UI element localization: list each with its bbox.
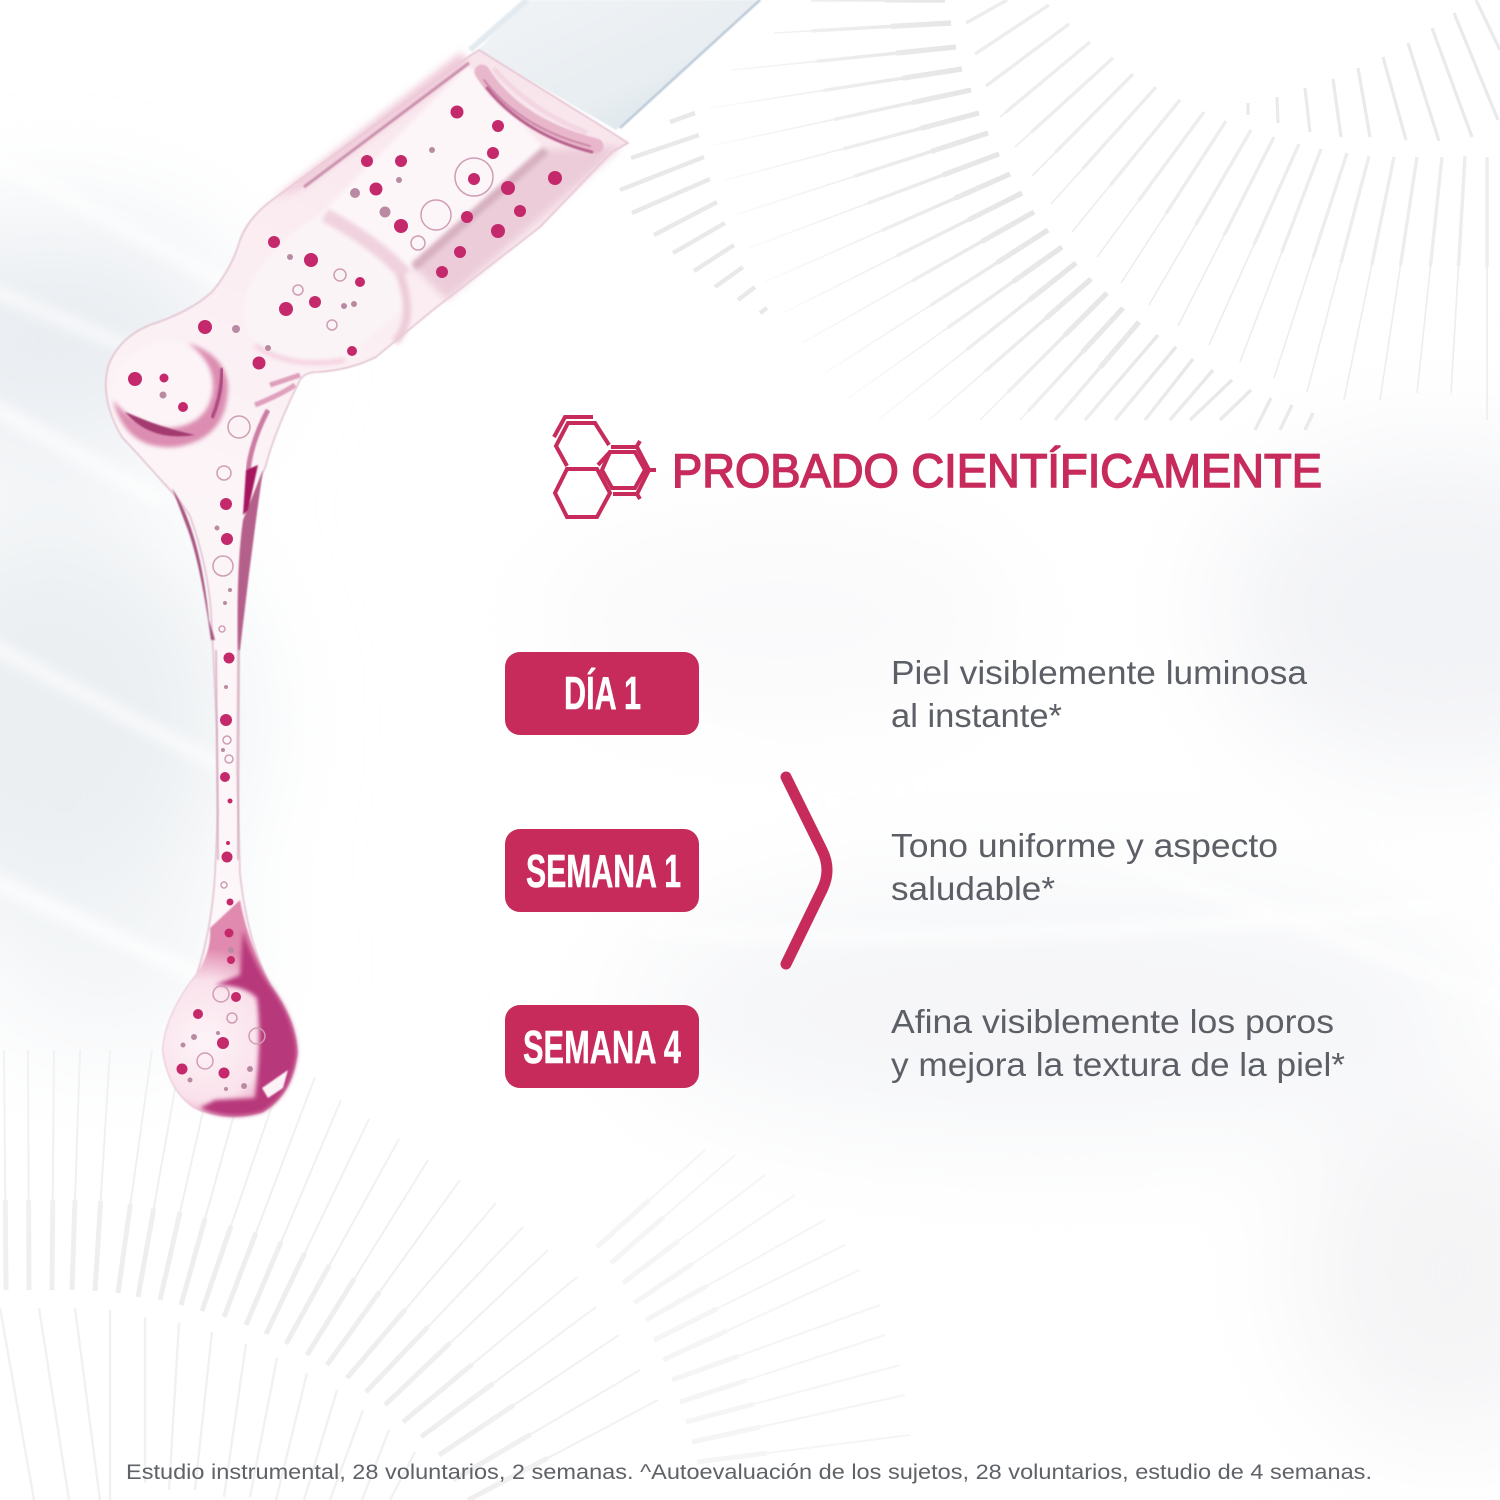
drop shading — [163, 900, 297, 1116]
text block: day 1 result: Piel visiblemente luminosa — [891, 654, 1308, 691]
badge: Día 1: DÍA 1 — [564, 667, 641, 719]
particles: pale dots — [160, 147, 435, 1091]
rays: middle ring — [966, 0, 1487, 420]
upper edge tint — [272, 52, 469, 200]
text block: week 1 result: Tono uniforme y aspecto — [891, 827, 1278, 864]
rays: right ring — [597, 1150, 910, 1462]
text block: week 1 result: saludable* — [891, 870, 1055, 907]
text block: day 1 result: al instante* — [891, 697, 1062, 734]
inner lower tinted band — [414, 146, 622, 300]
particles: bubbles — [197, 158, 493, 1069]
glass tube — [468, 0, 795, 142]
title: PROBADO CIENTÍFICAMENTE — [672, 444, 1322, 497]
collar crescent — [482, 70, 596, 152]
rays: inner ring — [1248, 0, 1500, 141]
sunburst rays: top right — [620, 0, 1500, 430]
arrow: chevron — [786, 777, 827, 964]
badge: Semana 4: SEMANA 4 — [523, 1021, 681, 1073]
text block: week 4 result: y mejora la textura de la piel* — [891, 1046, 1345, 1083]
rays: outermost ring — [620, 113, 767, 313]
bulb with crescent — [112, 342, 300, 470]
text block: week 4 result: Afina visiblemente los poros — [891, 1003, 1334, 1040]
liquid body and strand — [106, 50, 628, 1116]
text block: week 1 result — [891, 827, 1278, 907]
rays: lower ring — [0, 1308, 415, 1500]
sunburst rays: bottom left — [0, 1050, 910, 1500]
second chamber — [244, 213, 412, 367]
badge: Semana 1 — [505, 829, 699, 912]
inner clear chamber — [322, 65, 546, 268]
inner band dark edge — [414, 150, 546, 267]
serum dropper illustration — [106, 0, 795, 1116]
icon: hexagon molecule — [554, 417, 656, 517]
text block: week 4 result — [891, 1003, 1345, 1083]
strand dark edges — [172, 465, 263, 860]
rays: outer ring — [710, 0, 1313, 430]
inner upper edge line — [304, 63, 469, 187]
footnote: Estudio instrumental, 28 voluntarios, 2 semanas. ^Autoevaluación de los sujetos, 28 voluntarios, estudio de 4 semanas. — [126, 1461, 1372, 1484]
text block: day 1 result — [891, 654, 1308, 734]
badge: Día 1 — [505, 652, 699, 735]
particles: pink dots — [128, 106, 562, 1078]
badge: Semana 4 — [505, 1005, 699, 1088]
badge: Semana 1: SEMANA 1 — [526, 845, 681, 897]
rays: upper ring — [4, 1050, 658, 1500]
